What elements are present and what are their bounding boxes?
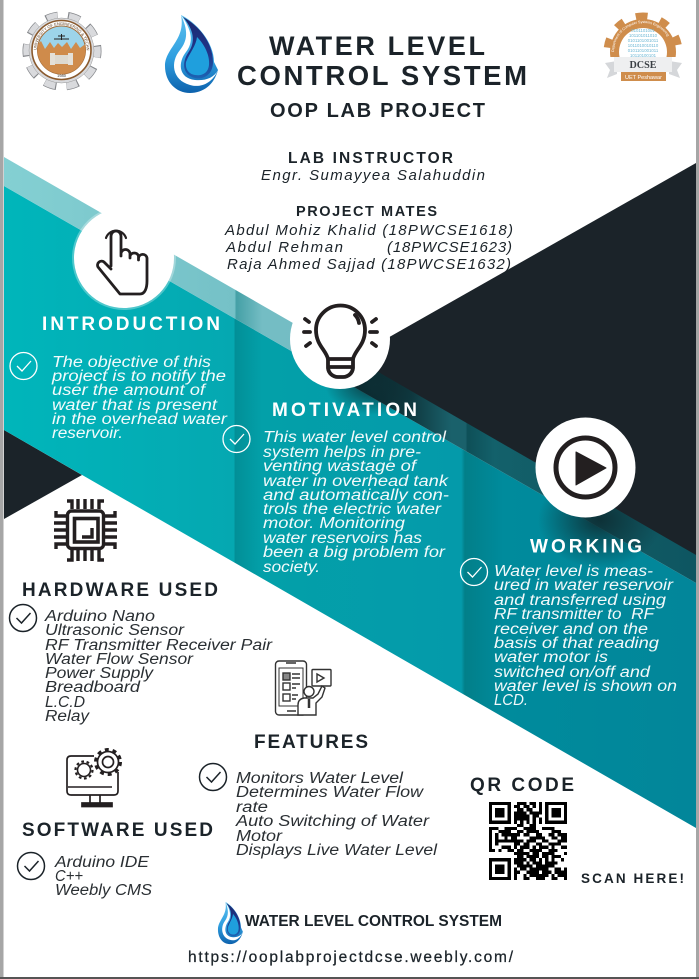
text: motivation: been a big problem for: [263, 544, 446, 561]
icon: pointing hand: [72, 206, 176, 310]
panel: introduction: [10, 206, 228, 442]
logo: DCSE badge: DCSE: [630, 60, 656, 71]
list: software: [54, 854, 153, 899]
logo: DCSE badge: 0101101001: [631, 28, 655, 33]
text: motivation: water reservoirs has: [263, 530, 422, 547]
text: working: RF transmitter to RF: [494, 606, 656, 623]
panel: hardware used: [10, 499, 273, 725]
icon: check: [200, 764, 226, 790]
list: features: Monitors Water Level: [236, 770, 404, 787]
heading: software used: SOFTWARE USED: [22, 820, 213, 841]
list: software: C++: [55, 868, 83, 885]
list: software: Arduino IDE: [54, 854, 150, 871]
text: working: and transferred using: [494, 592, 666, 609]
project mates: Raja Ahmed Sajjad (18PWCSE1632): [227, 256, 511, 273]
text: motivation: system helps in pre-: [263, 444, 421, 461]
qr image: [489, 802, 567, 880]
list: hardware: Breadboard: [45, 679, 142, 696]
list: features: Motor: [236, 828, 283, 845]
panel: motivation: [223, 289, 449, 576]
project mates: Abdul Rehman: [225, 239, 343, 256]
list: software: Weebly CMS: [55, 882, 153, 899]
list: hardware: [44, 608, 273, 725]
logo: DCSE badge: 1011010010110: [628, 43, 659, 48]
panel: features: [200, 661, 438, 859]
list: features: Displays Live Water Level: [236, 842, 438, 859]
logo: university seal: 1980: [57, 73, 67, 78]
logo: DCSE badge: 0101101001011: [628, 38, 659, 43]
caption: scan here: SCAN HERE!: [581, 871, 684, 886]
text: motivation: motor. Monitoring: [263, 515, 405, 532]
lab instructor: LAB INSTRUCTOR: [288, 150, 453, 167]
logo: DCSE badge: [604, 12, 682, 81]
text: working: basis of that reading: [494, 635, 659, 652]
list: features: rate: [236, 799, 268, 816]
logo: DCSE badge: UET Peshawar: [625, 75, 662, 81]
logo: DCSE badge: 101101011010: [629, 33, 658, 38]
lab instructor: Engr. Sumayyea Salahuddin: [261, 167, 485, 184]
text: motivation: and automatically con-: [263, 487, 449, 504]
panel: software used: [18, 748, 213, 899]
icon: play button: [536, 418, 636, 518]
icon: microchip: [54, 499, 117, 561]
title: CONTROL SYSTEM: [237, 60, 527, 91]
text: motivation: venting wastage of: [263, 458, 418, 475]
list: features: Determines Water Flow: [236, 784, 425, 801]
list: hardware: Arduino Nano: [44, 608, 155, 625]
text: motivation: This water level control: [263, 429, 447, 446]
subtitle: OOP LAB PROJECT: [270, 100, 485, 122]
icon: check: [460, 558, 488, 586]
footer url: https://ooplabprojectdcse.weebly.com/: [188, 949, 514, 966]
text: working: water motor is: [494, 649, 608, 666]
text: introduction: in the overhead water: [52, 411, 228, 428]
heading: hardware used: HARDWARE USED: [22, 580, 218, 601]
text: introduction: reservoir.: [52, 425, 123, 442]
text: motivation: trols the electric water: [263, 501, 442, 518]
project mates: (18PWCSE1623): [387, 239, 512, 256]
icon: check: [10, 604, 36, 632]
heading: features: FEATURES: [254, 732, 368, 753]
title: [237, 31, 527, 91]
heading: introduction: INTRODUCTION: [42, 314, 220, 335]
heading: qr code: QR CODE: [470, 775, 574, 796]
project mates: PROJECT MATES: [296, 204, 437, 220]
icon: light bulb: [290, 289, 390, 389]
icon: monitor with gears: [67, 748, 122, 806]
text: introduction: water that is present: [52, 397, 218, 414]
footer logo: small water drop: [218, 902, 243, 944]
text: introduction: [51, 354, 228, 442]
text: motivation: [263, 429, 449, 576]
text: introduction: The objective of this: [52, 354, 211, 371]
title: WATER LEVEL: [269, 31, 485, 61]
list: hardware: Relay: [45, 708, 90, 725]
heading: motivation: MOTIVATION: [272, 400, 417, 421]
logo: DCSE badge: 0101101001011: [628, 48, 659, 53]
list: hardware: Water Flow Sensor: [45, 651, 194, 668]
text: introduction: project is to notify the: [51, 368, 226, 385]
text: working: receiver and on the: [494, 621, 648, 638]
text: working: ured in water reservoir: [494, 577, 674, 594]
panel: qr code: [470, 775, 684, 886]
logo: water drop: [165, 15, 218, 93]
heading: working: WORKING: [530, 536, 642, 558]
logo: DCSE badge: Department of Computer Systems Engineering: [612, 20, 669, 52]
panel: working: [460, 418, 677, 709]
text: working: [494, 563, 677, 709]
text: motivation: water in overhead tank: [263, 473, 449, 490]
icon: phone with presenter: [276, 661, 331, 715]
text: working: switched on/off and: [494, 664, 652, 681]
text: working: LCD.: [494, 692, 528, 709]
project mates: [224, 204, 513, 273]
icon: check: [10, 352, 37, 380]
icon: check: [223, 426, 250, 452]
text: working: water level is shown on: [494, 678, 677, 695]
project mates: Abdul Mohiz Khalid (18PWCSE1618): [224, 222, 513, 239]
footer title: WATER LEVEL CONTROL SYSTEM: [245, 913, 502, 930]
logo: DCSE badge: 10110100101: [630, 53, 657, 58]
list: features: Auto Switching of Water: [235, 813, 430, 830]
lab instructor: [261, 150, 485, 184]
text: introduction: user the amount of: [52, 382, 207, 399]
list: hardware: Ultrasonic Sensor: [45, 622, 185, 639]
text: motivation: society.: [263, 559, 320, 576]
logo: university seal: [22, 12, 102, 90]
text: working: Water level is meas-: [494, 563, 653, 580]
icon: check: [18, 852, 44, 880]
list: hardware: RF Transmitter Receiver Pair: [45, 637, 273, 654]
list: hardware: Power Supply: [45, 665, 154, 682]
list: hardware: L.C.D: [45, 694, 85, 711]
list: features: [235, 770, 438, 859]
